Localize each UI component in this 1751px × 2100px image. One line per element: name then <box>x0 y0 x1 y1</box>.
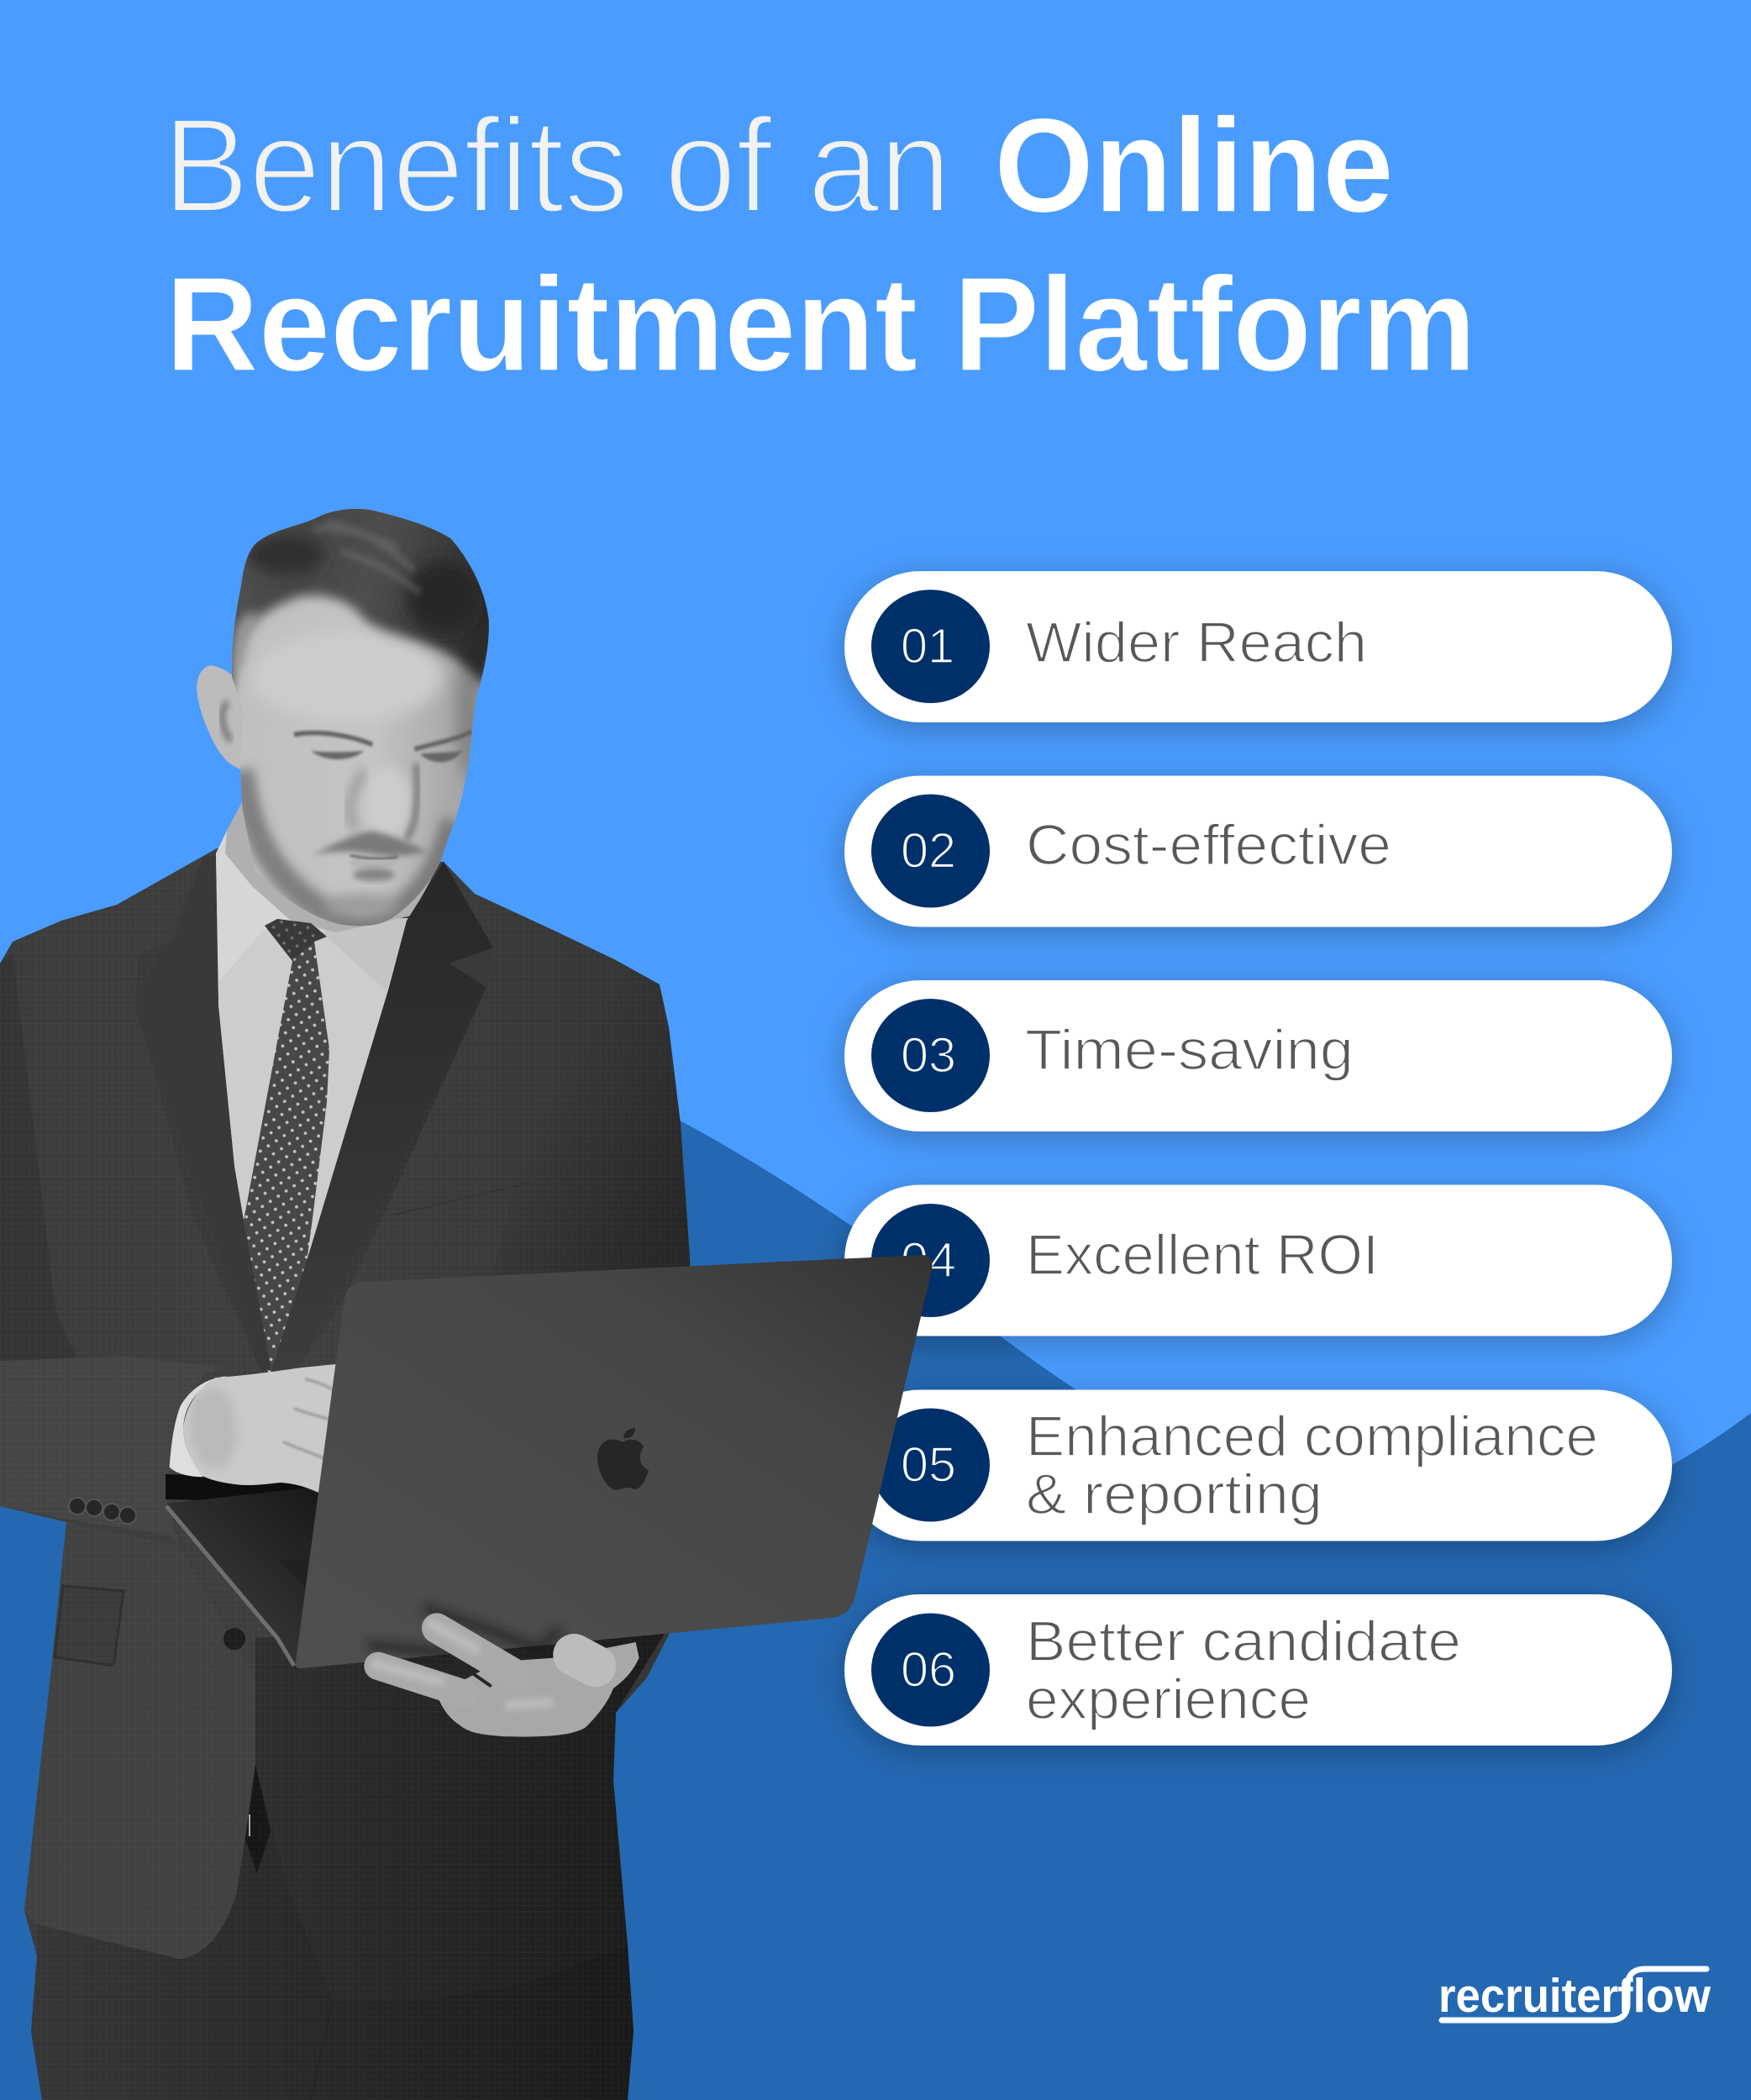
thumb <box>574 1655 595 1666</box>
breast pocket seam <box>394 1183 530 1215</box>
neck <box>225 756 450 932</box>
nose bridge shadow <box>350 770 364 828</box>
pill 02 Cost-effective: Cost-effective <box>1026 813 1391 877</box>
pill 06 Better candidate experience: 06 <box>901 1643 956 1697</box>
pill 01 Wider Reach <box>844 571 1672 722</box>
laptop base edge <box>166 1506 294 1666</box>
cuff buttons <box>69 1498 136 1524</box>
knuckle shading <box>189 1386 238 1470</box>
dark gap under the hand <box>166 1474 336 1504</box>
pill 04 Excellent ROI <box>844 1184 1672 1336</box>
pill 01 Wider Reach: 01 <box>901 619 954 674</box>
mouth line <box>350 855 397 858</box>
left eye <box>311 751 364 759</box>
jacket button <box>223 1627 246 1651</box>
right eye <box>420 751 462 762</box>
head <box>197 509 489 926</box>
pocket flap <box>55 1586 124 1665</box>
tie <box>244 919 329 1371</box>
shirt collar right <box>317 918 409 991</box>
finger highlights <box>376 1624 549 1705</box>
chin tuft <box>353 868 395 881</box>
facial features clipped to head <box>232 509 489 926</box>
pill 04 Excellent ROI: 04 <box>901 1233 956 1288</box>
trousers <box>31 1764 634 2100</box>
laptop base <box>166 1487 353 1672</box>
typing hand with cuff <box>170 1363 347 1498</box>
benefits list <box>844 571 1672 1746</box>
pill 05 Enhanced compliance and reporting: 05 <box>901 1438 956 1492</box>
pill 01 Wider Reach: Wider Reach <box>1026 611 1367 675</box>
pill 03 Time-saving: Time-saving <box>1025 1018 1354 1082</box>
trouser seam <box>311 1999 333 2100</box>
left lapel <box>135 856 271 1371</box>
right brow <box>414 732 472 749</box>
shirt <box>216 831 409 1378</box>
sleeve <box>0 1357 221 1546</box>
pill 03 Time-saving: 03 <box>901 1028 956 1083</box>
title line 2 bold: Recruitment Platform <box>166 249 1476 399</box>
finger gap <box>451 1658 490 1686</box>
right jacket panel <box>255 1621 672 1999</box>
hair dark front <box>246 535 325 574</box>
shirt cuff <box>170 1376 227 1477</box>
face base <box>232 509 489 926</box>
pill 06 Better candidate experience: Better candidate <box>1026 1609 1461 1673</box>
lips highlight <box>350 859 391 867</box>
finger shadows on lid <box>367 1607 560 1653</box>
holding hand <box>367 1607 639 1737</box>
sleeve weave <box>0 1357 221 1546</box>
nose side shadow <box>406 764 417 839</box>
gap between jacket panels <box>245 1764 271 1873</box>
left arm shade <box>0 953 76 1365</box>
pill 02 Cost-effective <box>844 776 1672 927</box>
suit weave texture <box>0 856 697 2100</box>
pill 05 Enhanced compliance and reporting: Enhanced compliance <box>1026 1404 1598 1468</box>
title <box>163 90 1476 399</box>
ear <box>197 665 246 770</box>
pill 05 Enhanced compliance and reporting: & reporting <box>1026 1462 1322 1526</box>
lower finger <box>378 1666 465 1694</box>
tie knot shadow <box>265 919 327 961</box>
shirt collar left <box>216 831 319 982</box>
apple logo <box>597 1428 649 1490</box>
title line 1 light: Benefits of an <box>163 90 951 240</box>
moustache <box>313 831 427 856</box>
hand back <box>183 1363 347 1498</box>
hair <box>232 509 489 694</box>
laptop vent mark <box>279 1559 308 1588</box>
title line 1 bold: Online <box>994 90 1394 240</box>
right temple shadow <box>455 658 483 780</box>
recruiterflow logo <box>1438 1969 1712 2023</box>
pill 05 Enhanced compliance and reporting <box>844 1389 1672 1541</box>
shirt tag mark <box>249 1814 250 1836</box>
pill 06 Better candidate experience: experience <box>1026 1667 1311 1731</box>
left jacket panel <box>24 1522 255 1959</box>
hair highlights <box>313 522 420 593</box>
suit jacket silhouette <box>0 848 697 2100</box>
hair dark crown <box>406 561 479 632</box>
hair side fade <box>233 612 260 674</box>
jaw beard <box>242 770 454 925</box>
pill 02 Cost-effective: 02 <box>901 823 956 879</box>
logo flow line <box>1442 1969 1706 2020</box>
palm <box>437 1642 639 1737</box>
dark wave background shape <box>0 966 1751 2100</box>
ear inner shadow <box>222 702 231 741</box>
logo wordmark left: recruiter <box>1438 1969 1618 2023</box>
pill 04 Excellent ROI: Excellent ROI <box>1026 1223 1379 1287</box>
chin beard light <box>325 894 397 916</box>
pill 06 Better candidate experience <box>844 1594 1672 1746</box>
nose <box>371 768 412 834</box>
left brow <box>294 732 372 744</box>
right arm shade <box>471 960 694 1361</box>
right lapel <box>271 862 493 1371</box>
upper finger <box>437 1628 515 1674</box>
pill 03 Time-saving <box>844 980 1672 1131</box>
laptop lid <box>296 1255 933 1668</box>
man in suit holding laptop <box>0 487 933 2100</box>
finger creases <box>283 1379 336 1460</box>
forehead highlight <box>257 639 445 716</box>
logo wordmark right: flow <box>1617 1969 1712 2023</box>
